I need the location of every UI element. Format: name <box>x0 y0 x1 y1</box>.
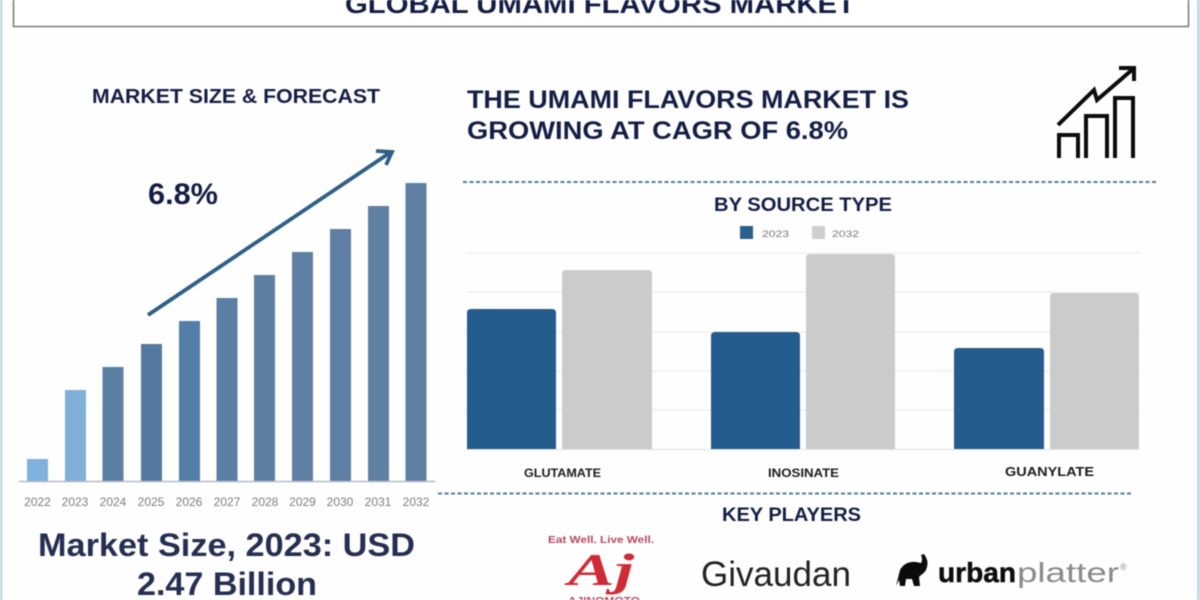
logo: Givaudan: Givaudan <box>701 555 851 594</box>
bar chart: market size forecast: 2023 <box>62 495 89 509</box>
growth rate label: 6.8% <box>148 178 218 211</box>
logo: Urban Platter: urban <box>938 557 1016 588</box>
bar chart: by source type: INOSINATE <box>768 466 839 480</box>
bar chart: by source type <box>466 253 1140 480</box>
market size callout <box>38 527 415 600</box>
logo: Ajinomoto: Eat Well. Live Well. <box>548 534 654 546</box>
headline: CAGR statement <box>467 86 909 145</box>
bar chart: market size forecast: 2025 <box>138 495 165 509</box>
chart legend: 2023 <box>762 229 789 240</box>
market size callout: Market Size, 2023: USD <box>38 527 415 563</box>
bar chart: market size forecast: 2028 <box>252 495 279 509</box>
arrow: growth trend <box>148 151 392 315</box>
icon: rising bar chart with arrow <box>1058 68 1134 158</box>
bar chart: market size forecast: 2024 <box>100 495 127 509</box>
logo: Urban Platter: platter <box>1017 557 1119 588</box>
heading: key players: KEY PLAYERS <box>722 505 861 526</box>
chart legend <box>740 226 859 240</box>
bar chart: market size forecast: 2030 <box>327 495 354 509</box>
bar chart: market size forecast <box>19 183 435 509</box>
logo: Ajinomoto <box>548 534 654 600</box>
bar chart: market size forecast: 2031 <box>365 495 392 509</box>
title banner <box>14 0 1188 26</box>
logo: Urban Platter <box>896 554 1127 588</box>
logo: Ajinomoto: Aj <box>563 544 634 595</box>
bar chart: market size forecast: 2032 <box>403 495 430 509</box>
heading: market size and forecast: MARKET SIZE & FORECAST <box>92 86 380 108</box>
headline: CAGR statement: GROWING AT CAGR OF 6.8% <box>467 117 848 145</box>
bar chart: by source type: GLUTAMATE <box>524 466 601 480</box>
bar chart: market size forecast: 2029 <box>289 495 316 509</box>
bar chart: market size forecast: 2022 <box>24 495 51 509</box>
chart legend: 2032 <box>832 229 859 240</box>
bar chart: by source type: GUANYLATE <box>1005 464 1094 479</box>
icon: elephant <box>896 554 928 586</box>
headline: CAGR statement: THE UMAMI FLAVORS MARKET IS <box>467 86 909 114</box>
bar chart: market size forecast: 2026 <box>176 495 203 509</box>
heading: by source type: BY SOURCE TYPE <box>714 195 892 216</box>
logo: Urban Platter: ® <box>1120 562 1127 572</box>
bar chart: market size forecast: 2027 <box>214 495 241 509</box>
